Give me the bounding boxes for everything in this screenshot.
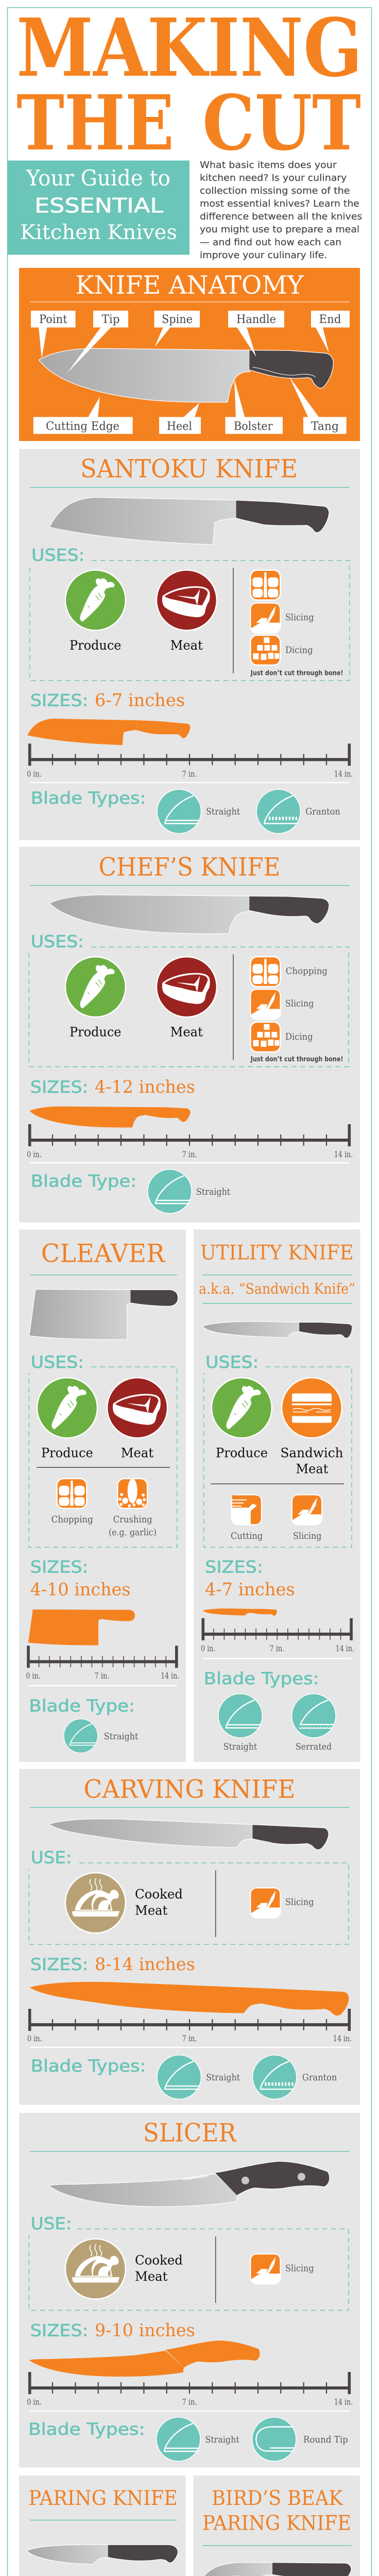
use: cooked meat: Meat [135,1903,167,1918]
intro text: most essential knives? Learn the [200,198,359,209]
blade: serrated [292,1694,336,1752]
cut: slicing: Slicing [285,2263,314,2274]
sizes heading [30,1077,195,1097]
sizes heading: SIZES: [30,1557,88,1577]
cut: chopping: Chopping [51,1514,93,1525]
knife illustration: slicer [49,2162,329,2206]
cut: crushing: (e.g. garlic) [109,1527,157,1538]
blade types heading: Blade Types: [204,1669,319,1688]
use: meat [107,1378,167,1461]
size silhouette [29,2341,260,2377]
ruler [26,1646,179,1681]
sizes heading: SIZES: [30,1955,88,1974]
use: meat [157,957,217,1040]
callout: bolster: Bolster [234,420,273,433]
blade: straight [157,2055,240,2099]
use: produce [212,1378,272,1461]
use: cooked meat: Cooked [135,2253,183,2268]
use: meat [157,570,217,653]
heading: utility knife: UTILITY KNIFE [200,1241,354,1264]
size silhouette [27,719,190,745]
blade: granton [256,789,340,834]
callout: tip: Tip [102,313,119,326]
sizes heading [30,1557,131,1600]
callout: tang: Tang [311,420,339,433]
panel: knife anatomy [19,268,360,441]
sizes heading: SIZES: [30,2320,88,2340]
heading: paring knife: PARING KNIFE [28,2487,178,2510]
knife illustration: bird's beak [202,2563,351,2576]
note: Just don’t cut through bone! [250,1056,343,1063]
anatomy knife [40,349,333,402]
blade type heading: Blade Type: [31,1171,136,1191]
ruler: 0 in. [27,769,42,778]
cut: slicing: Slicing [285,612,314,623]
ruler: 0 in. [27,2397,42,2407]
heading: slicer: SLICER [143,2119,237,2148]
panel: carving knife [19,1769,360,2105]
cut icon: chopping [250,570,280,600]
subtitle banner: Your Guide to [26,165,170,191]
ruler [27,2009,352,2043]
sizes heading [30,1954,195,1975]
ruler: 7 in. [182,2397,197,2407]
cut: cutting: Cutting [231,1531,263,1541]
use: produce: Produce [70,638,122,653]
intro text [200,160,362,261]
callout: spine [154,311,200,328]
subheading: a.k.a.: a.k.a. “Sandwich Knife” [199,1280,355,1297]
callout: spine: Spine [162,313,193,326]
use: produce: Produce [41,1446,93,1461]
heading: chef's knife: CHEF’S KNIFE [99,853,280,882]
cut: crushing [109,1479,157,1538]
sizes heading: 4-10 inches [30,1580,131,1600]
use: produce [65,570,126,653]
use: meat: Meat [121,1446,153,1461]
subtitle banner [7,161,190,255]
cut: dicing [250,635,313,665]
uses heading: USES: [31,1352,84,1372]
cut: dicing [250,1022,313,1052]
knife illustration: carving [49,1819,329,1850]
cut: chopping: Chopping [286,965,328,976]
blade: straight [148,1170,231,1213]
callout: point [31,311,75,328]
use: cooked meat [65,1873,183,1933]
use: produce: Produce [216,1446,268,1461]
ruler: 7 in. [269,1643,284,1653]
heading: cleaver: CLEAVER [41,1239,166,1268]
callout: cutting edge [33,417,133,434]
blade: granton: Granton [305,806,340,817]
intro text: kitchen need? Is your culinary [200,173,347,183]
knife illustration: cleaver [29,1290,178,1340]
callout pointers [39,327,329,417]
use: cooked meat: Meat [135,2269,167,2284]
uses heading: USES: [205,1352,259,1372]
cut: slicing: Slicing [285,1897,314,1908]
callout: cutting edge: Cutting Edge [46,420,119,433]
use: sandwich meat: Sandwich [280,1446,343,1461]
sizes heading: 6-7 inches [95,690,185,711]
ruler: 14 in. [334,1149,353,1159]
sizes heading [30,690,185,711]
callout: bolster [226,417,283,434]
ruler: 7 in. [182,769,197,778]
uses heading: USES: [31,931,84,951]
callout: heel: Heel [167,420,192,433]
use: produce: Produce [70,1025,122,1040]
note: Just don’t cut through bone! [250,669,343,677]
use heading: USE: [31,2214,72,2233]
ruler: 14 in. [333,2033,352,2043]
sizes heading: 8-14 inches [95,1954,195,1975]
cut: slicing [250,989,314,1019]
intro text: you might use to prepare a meal [200,224,359,235]
cut: chopping [51,1479,93,1525]
panel: cleaver [19,1230,186,1762]
intro text: collection missing some of the [200,185,350,196]
cut: slicing [250,1888,314,1918]
knife illustration: chef [50,895,329,934]
heading: santoku knife: SANTOKU KNIFE [80,454,298,483]
blade types heading: Blade Types: [31,788,146,808]
callout: end [311,311,350,328]
blade types heading: Blade Types: [28,2419,145,2439]
sizes heading: SIZES: [30,1077,88,1097]
use heading: USE: [31,1848,72,1867]
panel: chef's knife [19,846,360,1223]
use: cooked meat: Cooked [135,1887,183,1902]
callout: handle [228,311,284,328]
subtitle banner: Kitchen Knives [20,221,177,244]
ruler: 7 in. [95,1671,109,1681]
blade: straight: Straight [206,2072,240,2083]
blade: granton: Granton [302,2072,337,2083]
callout: handle: Handle [236,313,276,326]
heading: carving knife: CARVING KNIFE [83,1774,296,1804]
cut: slicing [292,1495,322,1541]
sizes heading: 4-12 inches [95,1077,195,1097]
sizes heading: SIZES: [205,1557,263,1577]
knife illustration: utility [202,1322,352,1338]
size silhouette [29,1107,190,1127]
ruler [27,743,353,778]
cut: slicing [250,603,314,633]
sizes heading [205,1557,295,1600]
callout: heel [159,417,201,434]
knife illustration: paring [27,2545,178,2564]
ruler: 7 in. [182,2033,197,2043]
blade types heading: Blade Types: [31,2056,146,2076]
blade: straight [157,789,240,834]
cut: slicing: Slicing [285,998,314,1009]
blade: round tip [252,2417,348,2461]
blade: straight: Straight [196,1187,231,1197]
blade type heading: Blade Type: [29,1696,135,1716]
sizes heading: SIZES: [30,690,88,710]
use: produce [37,1378,97,1461]
panel: paring knife [19,2476,185,2576]
blade: straight: Straight [206,806,240,817]
callout: tang [303,417,347,434]
heading: bird's beak paring knife [202,2487,351,2535]
blade: straight [64,1719,139,1753]
blade: granton [252,2055,337,2099]
cut: slicing: Slicing [293,1531,321,1541]
size silhouette [202,1608,277,1616]
callout: end: End [319,313,341,326]
ruler: 14 in. [334,2397,353,2407]
use: meat: Meat [170,638,203,653]
use: produce [65,957,126,1040]
size silhouette [28,1609,135,1645]
use: meat: Meat [170,1025,203,1040]
cut: dicing: Dicing [285,1031,313,1042]
size silhouette [29,1982,349,2015]
panel: bird's beak paring knife [194,2476,360,2576]
intro text: What basic items does your [200,160,337,171]
sizes heading: 4-7 inches [205,1580,295,1600]
blade: straight: Straight [104,1731,139,1742]
ruler: 0 in. [26,1671,41,1681]
cut: crushing: Crushing [113,1514,152,1525]
intro text: — and find out how each can [200,237,341,248]
cut: cutting [231,1495,263,1541]
use: sandwich meat: Meat [296,1462,329,1477]
uses heading: USES: [31,545,84,565]
knife illustration: santoku [50,498,329,544]
blade: straight: Straight [205,2434,239,2445]
subtitle banner: ESSENTIAL [35,195,163,217]
heading: knife anatomy: KNIFE ANATOMY [75,270,304,300]
ruler: 14 in. [161,1671,179,1681]
ruler: 14 in. [334,769,353,778]
ruler: 14 in. [336,1643,354,1653]
panel: santoku knife [19,449,360,840]
blade: serrated: Serrated [296,1741,332,1752]
panel: utility knife [194,1230,360,1762]
use: sandwich meat [280,1378,343,1477]
heading: bird's beak paring knife: BIRD’S BEAK [212,2487,343,2510]
cut: slicing [250,2254,314,2284]
heading: bird's beak paring knife: PARING KNIFE [202,2512,351,2535]
callout: tip [93,311,128,328]
blade: straight [218,1694,262,1752]
blade: straight: Straight [223,1741,257,1752]
ruler: 7 in. [182,1149,197,1159]
ruler: 0 in. [27,2033,42,2043]
ruler [201,1618,354,1653]
title: THE [16,78,174,167]
use: cooked meat [65,2239,183,2299]
cut: dicing: Dicing [285,645,313,655]
panel: slicer [19,2113,360,2468]
intro text: difference between all the knives [200,211,362,222]
cut: chopping [250,957,328,987]
ruler: 0 in. [201,1643,216,1653]
intro text: improve your culinary life. [200,250,327,261]
title [16,1,363,167]
callout: point: Point [39,313,67,326]
ruler [27,1124,353,1159]
ruler [27,2372,353,2407]
sizes heading: 9-10 inches [95,2320,195,2341]
ruler: 0 in. [27,1149,42,1159]
blade: round tip: Round Tip [303,2434,348,2445]
blade: straight [157,2417,239,2461]
sizes heading [30,2320,195,2341]
